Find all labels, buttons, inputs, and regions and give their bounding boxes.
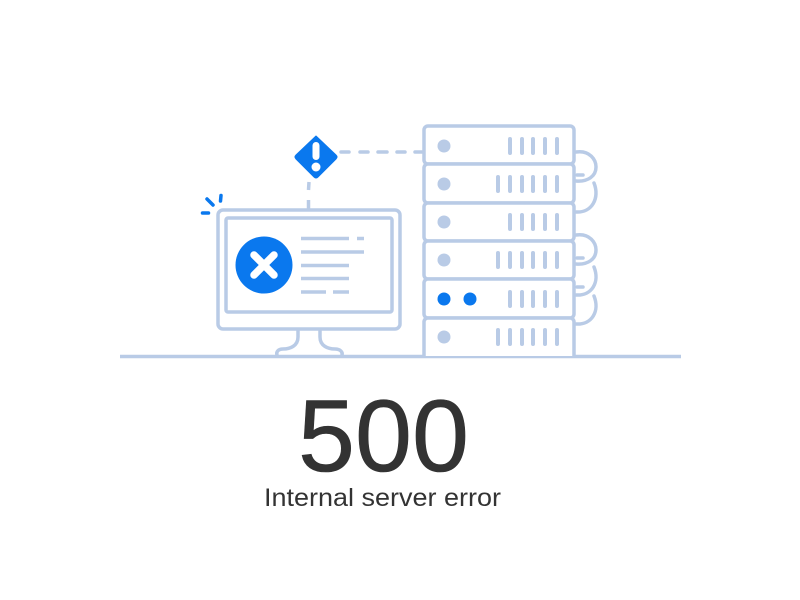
monitor screen — [226, 218, 392, 312]
cable loops — [576, 152, 596, 324]
monitor stand — [277, 330, 342, 355]
server unit 4 — [424, 241, 574, 279]
dashed connector: alert to server — [341, 150, 423, 154]
server unit 1 — [424, 126, 574, 164]
heading: 500: 500 — [298, 379, 469, 493]
error text lines — [301, 238, 364, 292]
icon: error circle — [236, 236, 292, 294]
monitor — [218, 210, 400, 355]
server unit 3 — [424, 203, 574, 241]
server rack — [424, 126, 596, 356]
icon: spark marks — [202, 196, 221, 213]
icon: alert diamond — [295, 136, 337, 178]
server unit 5 with blue lights — [424, 279, 574, 318]
dashed connector: alert to monitor — [307, 182, 311, 210]
server unit 6 — [424, 318, 574, 356]
subtitle: Internal server error — [264, 484, 501, 512]
server unit 2 — [424, 164, 574, 203]
monitor frame — [218, 210, 400, 329]
ground line — [120, 355, 681, 358]
